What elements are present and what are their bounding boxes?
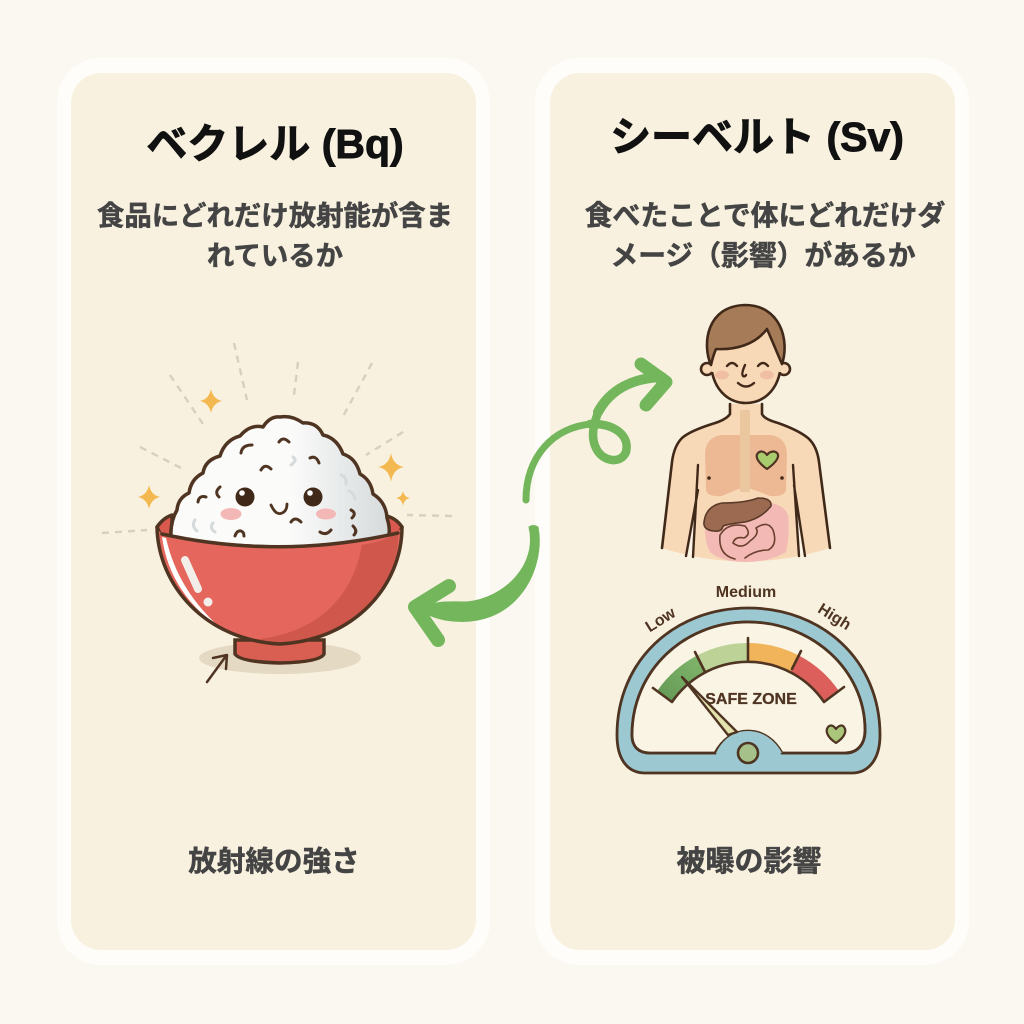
icon: heart <box>757 452 778 469</box>
arrow: curved to body <box>526 364 666 500</box>
heading: sievert: シーベルト (Sv) <box>610 114 904 160</box>
gauge labels: SAFE ZONE <box>705 691 797 708</box>
gauge outline inner <box>632 622 865 753</box>
caption: sievert: 被曝の影響 <box>676 845 822 878</box>
gauge hub <box>716 731 782 753</box>
gauge labels: High <box>815 601 854 634</box>
trachea <box>740 410 750 492</box>
text: becquerel description <box>97 200 453 271</box>
text: becquerel description: 食品にどれだけ放射能が含ま <box>97 200 453 231</box>
gauge labels <box>643 584 854 708</box>
illustration: rice bowl <box>102 343 452 682</box>
text: becquerel description: れているか <box>207 240 343 271</box>
rice mound <box>171 417 389 547</box>
bowl foot <box>235 640 324 663</box>
ears <box>701 363 713 375</box>
torso silhouette <box>662 404 830 562</box>
torso outline <box>662 404 830 548</box>
face <box>727 363 768 386</box>
panel: sievert <box>535 58 969 965</box>
gauge labels: Low <box>643 604 679 636</box>
text: sievert description: 食べたことで体にどれだけダ <box>585 200 945 231</box>
cheeks <box>715 370 729 380</box>
bowl highlight <box>185 560 198 589</box>
gauge housing <box>617 608 880 773</box>
panel: becquerel <box>57 58 490 965</box>
bowl outline <box>157 527 402 644</box>
head <box>709 315 782 402</box>
gauge face <box>632 622 865 753</box>
gauge labels: Medium <box>716 584 776 601</box>
shadow <box>199 642 361 674</box>
gauge needle <box>682 677 737 735</box>
text: sievert description <box>585 200 945 271</box>
rice grains <box>198 439 356 536</box>
icon: sparkles <box>138 389 410 509</box>
rice face <box>220 488 336 520</box>
lungs <box>705 435 787 496</box>
caption: becquerel: 放射線の強さ <box>188 846 360 878</box>
gauge baseline and ticks <box>653 638 844 702</box>
small arrow <box>207 655 227 682</box>
heading: becquerel: ベクレル (Bq) <box>146 121 404 167</box>
hair <box>707 305 785 365</box>
radiating dashed rays <box>102 343 452 533</box>
intestines <box>705 502 789 562</box>
gauge segments <box>665 652 832 696</box>
text: sievert description: メージ（影響）があるか <box>610 240 916 271</box>
gauge <box>617 584 880 773</box>
illustration: human body <box>662 305 830 562</box>
liver <box>704 498 771 531</box>
bowl shade <box>250 533 398 644</box>
bowl back rim <box>157 515 402 545</box>
arrow: curved to bowl <box>415 526 539 640</box>
arm gaps <box>686 480 698 558</box>
icon: gauge heart <box>827 726 845 743</box>
nipples <box>707 476 711 480</box>
bowl white reflection <box>162 537 224 631</box>
bowl body <box>157 527 402 644</box>
